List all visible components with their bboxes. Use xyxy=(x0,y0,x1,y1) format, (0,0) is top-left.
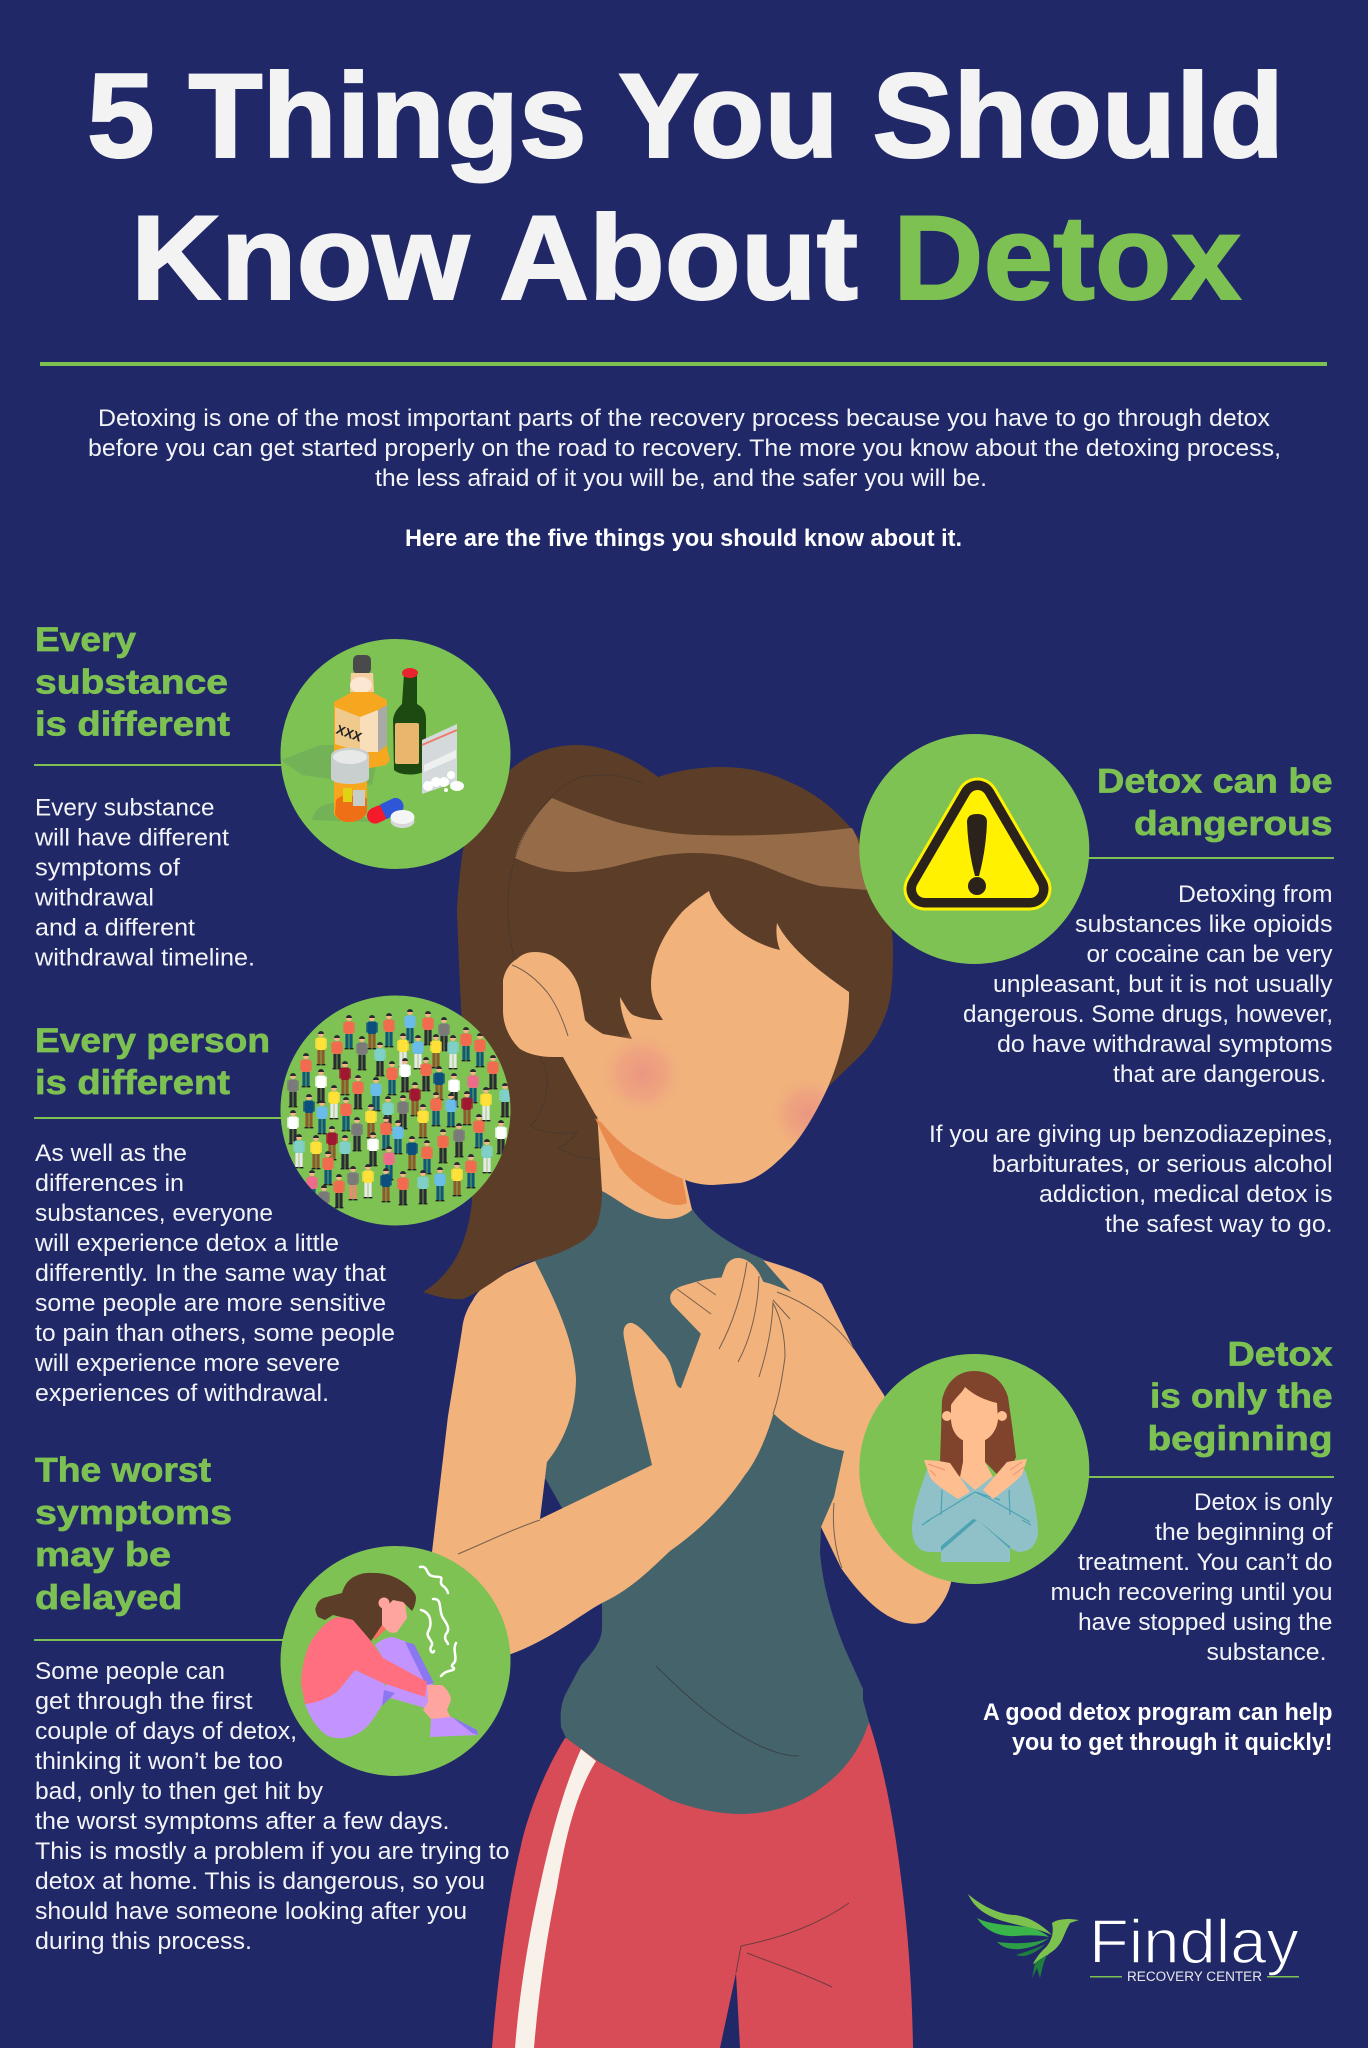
body text: do have withdrawal symptoms xyxy=(997,1031,1332,1058)
body text: unpleasant, but it is not usually xyxy=(993,971,1332,998)
body text: will experience detox a little xyxy=(34,1230,339,1257)
heading xyxy=(35,1452,232,1617)
heading: The worst xyxy=(35,1452,211,1490)
hair and body line details xyxy=(458,775,854,1987)
body text: Detoxing from xyxy=(1178,881,1332,908)
body text: Detox is only xyxy=(1194,1489,1332,1516)
cheek blush right xyxy=(782,1087,828,1145)
heading xyxy=(35,1022,270,1102)
body text: much recovering until you xyxy=(1050,1579,1332,1606)
body text: or cocaine can be very xyxy=(1086,941,1332,968)
intro text: before you can get started properly on the road to recovery. The more you know about the detoxing process, xyxy=(88,435,1281,462)
heading: Every person xyxy=(35,1022,270,1060)
logo: Findlay Recovery Center xyxy=(968,1894,1299,1984)
panel: detox is only the beginning xyxy=(859,1336,1334,1756)
body text xyxy=(34,1140,395,1407)
body text: addiction, medical detox is xyxy=(1039,1181,1332,1208)
icon: bottles and pills: XXX xyxy=(334,722,364,745)
tagline: RECOVERY CENTER xyxy=(1127,1969,1262,1984)
bold callout xyxy=(983,1699,1332,1756)
body text: during this process. xyxy=(35,1928,252,1955)
heading: may be xyxy=(35,1536,171,1574)
heading xyxy=(1097,762,1332,843)
heading: beginning xyxy=(1148,1420,1332,1458)
body text: and a different xyxy=(35,914,195,942)
body text: Every substance xyxy=(35,794,214,822)
hair back xyxy=(423,745,893,1299)
body text: the beginning of xyxy=(1155,1519,1333,1546)
bold callout: A good detox program can help xyxy=(983,1699,1332,1726)
heading xyxy=(1148,1336,1333,1458)
heading xyxy=(35,621,230,744)
heading: dangerous xyxy=(1134,805,1332,843)
icon: woman crossing arms xyxy=(859,1354,1089,1584)
body text: As well as the xyxy=(35,1140,187,1167)
intro text: Detoxing is one of the most important parts of the recovery process because you have to go through detox xyxy=(98,405,1270,432)
body text: thinking it won’t be too xyxy=(35,1748,283,1775)
heading: delayed xyxy=(35,1579,182,1617)
hair highlight xyxy=(515,798,867,890)
body text: barbiturates, or serious alcohol xyxy=(992,1151,1332,1178)
body text: differences in xyxy=(35,1170,184,1197)
pants xyxy=(492,1722,913,2048)
body text: detox at home. This is dangerous, so you xyxy=(35,1868,485,1895)
body text: Some people can xyxy=(35,1658,225,1685)
body text: the safest way to go. xyxy=(1105,1211,1332,1238)
body text: substances like opioids xyxy=(1075,911,1332,938)
pants side stripe xyxy=(515,1749,596,2048)
title: Detox xyxy=(893,191,1241,325)
intro text: the less afraid of it you will be, and the safer you will be. xyxy=(375,465,987,492)
illustration: woman with hand on chest xyxy=(400,745,953,2048)
icon: distressed woman hugging knees xyxy=(280,1546,510,1776)
far arm and hand xyxy=(670,1260,953,1624)
heading: Detox can be xyxy=(1097,762,1332,800)
body text: will have different xyxy=(34,824,229,852)
body text: This is mostly a problem if you are trying to xyxy=(35,1838,509,1865)
body text: will experience more severe xyxy=(34,1350,340,1377)
body text: that are dangerous. xyxy=(1113,1061,1326,1088)
title: 5 Things You Should xyxy=(87,49,1284,183)
heading: is different xyxy=(35,1064,230,1102)
body text: dangerous. Some drugs, however, xyxy=(963,1001,1333,1028)
body text: bad, only to then get hit by xyxy=(35,1778,323,1805)
body text: experiences of withdrawal. xyxy=(35,1380,329,1407)
icon: bottles and pills xyxy=(280,639,510,869)
body text: withdrawal timeline. xyxy=(34,944,255,972)
title xyxy=(87,49,1284,325)
panel: every substance is different xyxy=(34,621,510,972)
body text xyxy=(929,881,1333,1238)
body text: substances, everyone xyxy=(35,1200,273,1227)
neck shadow xyxy=(595,1118,687,1205)
bold callout: you to get through it quickly! xyxy=(1012,1729,1332,1756)
intro text xyxy=(88,405,1281,492)
panel: detox can be dangerous xyxy=(859,734,1334,1238)
intro bold line: Here are the five things you should know about it. xyxy=(405,525,962,552)
body text: substance. xyxy=(1206,1639,1326,1666)
cheek blush left xyxy=(598,1030,686,1118)
heading: Every xyxy=(35,621,136,659)
body text: should have someone looking after you xyxy=(35,1898,467,1925)
heading: is only the xyxy=(1150,1378,1332,1416)
icon: crowd of people xyxy=(280,996,511,1226)
panel: the worst symptoms may be delayed xyxy=(34,1452,510,1955)
face and ear xyxy=(503,891,849,1185)
heading: Detox xyxy=(1228,1336,1333,1374)
body text xyxy=(35,1658,509,1955)
body text: If you are giving up benzodiazepines, xyxy=(929,1121,1333,1148)
panel: every person is different xyxy=(34,996,511,1407)
body text: withdrawal xyxy=(34,884,154,912)
near arm and hand xyxy=(400,1258,785,1700)
body text: symptoms of xyxy=(35,854,180,882)
neck xyxy=(597,1112,692,1219)
bird mark xyxy=(968,1894,1079,1978)
body text: some people are more sensitive xyxy=(35,1290,386,1317)
heading: is different xyxy=(35,706,230,744)
icon: warning triangle xyxy=(859,734,1089,964)
body text: differently. In the same way that xyxy=(35,1260,386,1287)
body text xyxy=(1050,1489,1333,1666)
body text: the worst symptoms after a few days. xyxy=(35,1808,450,1835)
body text xyxy=(34,794,255,972)
title: Know About xyxy=(131,191,858,325)
body text: have stopped using the xyxy=(1078,1609,1332,1636)
shirt xyxy=(535,1190,869,1814)
body text: couple of days of detox, xyxy=(35,1718,297,1745)
wordmark: Findlay xyxy=(1089,1908,1299,1977)
heading: symptoms xyxy=(35,1494,232,1532)
body text: treatment. You can’t do xyxy=(1078,1549,1332,1576)
body text: get through the first xyxy=(35,1688,253,1715)
body text: to pain than others, some people xyxy=(35,1320,395,1347)
heading: substance xyxy=(35,664,228,702)
